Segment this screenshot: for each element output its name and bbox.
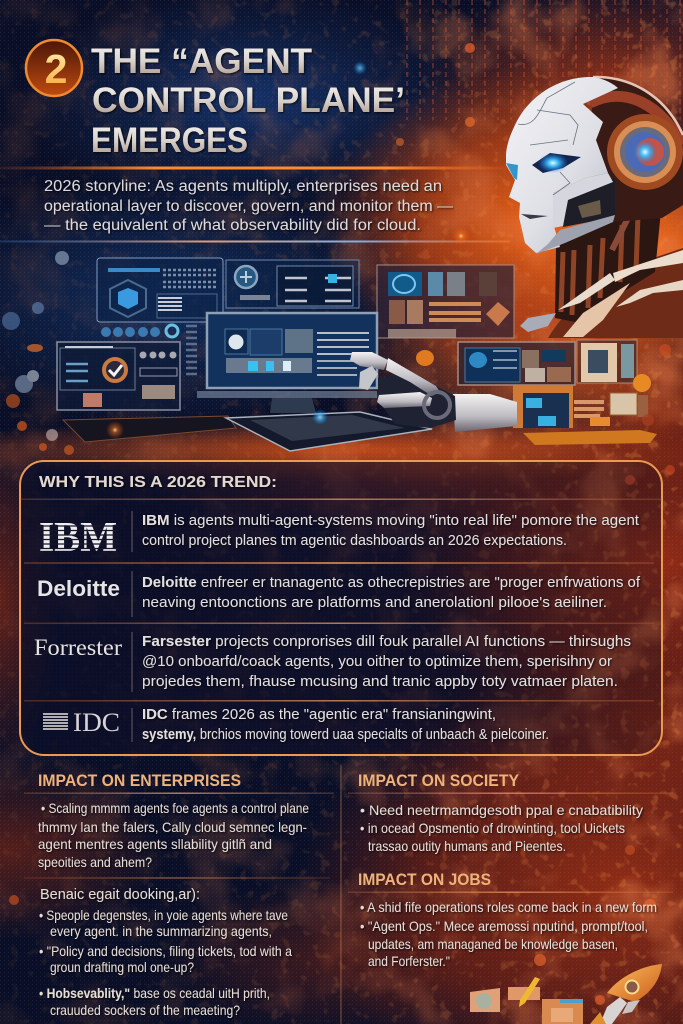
bullets: • in ocead Opsmentio of drowinting, tool Uickets bbox=[360, 820, 625, 836]
bullets: • A shid fife operations roles come back in a new form bbox=[360, 899, 657, 915]
badge: number 2: 2 bbox=[45, 46, 67, 92]
icons: office objects bbox=[470, 977, 583, 1024]
rule under storyline bbox=[0, 240, 510, 242]
subheading: Benaic egait dooking,ar): bbox=[40, 886, 200, 903]
bullets: • "Policy and decisions, filing tickets, tod with a bbox=[39, 943, 292, 959]
text: neaving entoonctions are platforms and anerolationl pilooe's aeiliner. bbox=[142, 595, 607, 611]
bullets: • Speople degenstes, in yoie agents where tave bbox=[39, 907, 288, 923]
logo: IDC: IDC bbox=[73, 708, 120, 737]
robot hand bbox=[350, 352, 517, 432]
bullets: thmmy lan the falers, Cally cloud semnec legn- bbox=[38, 819, 307, 835]
text: control project planes tm agentic dashboards an 2026 expectations. bbox=[142, 533, 567, 549]
text: IDC frames 2026 as the "agentic era" fransianingwint, bbox=[142, 707, 496, 723]
storyline text: — the equivalent of what observability did for cloud. bbox=[44, 217, 421, 234]
dashboard: top middle bbox=[226, 260, 359, 308]
storyline text bbox=[44, 178, 454, 234]
neck bbox=[555, 200, 662, 322]
keyboard: left bbox=[63, 416, 236, 442]
bullets: and Forferster." bbox=[368, 953, 450, 969]
panel: why this is a 2026 trend bbox=[20, 461, 662, 755]
shoulder plates bbox=[520, 250, 683, 337]
bullets: • Scaling mmmm agents foe agents a control plane bbox=[41, 800, 309, 816]
bullets bbox=[39, 907, 292, 1018]
dashboard: right document bbox=[577, 340, 637, 383]
bullets: • "Agent Ops." Mece aremossi nputind, prompt/tool, bbox=[360, 918, 648, 934]
bullets bbox=[38, 800, 309, 870]
ear ring bbox=[607, 114, 683, 190]
dashboard: top right bbox=[377, 265, 514, 338]
keyboard: center bbox=[226, 412, 432, 451]
bullets: speoities and ahem? bbox=[38, 854, 152, 870]
icon: rocket bbox=[590, 964, 662, 1024]
eye bbox=[532, 153, 581, 173]
text: projedes them, fhause mcusing and tranic appby toty vatmaer platen. bbox=[142, 674, 618, 690]
dashboard: lower right bbox=[458, 342, 575, 385]
logo: Forrester: Forrester bbox=[34, 635, 122, 660]
icon: photo frame bbox=[470, 988, 500, 1012]
logo: Deloitte: Deloitte bbox=[37, 576, 120, 601]
shoulder bbox=[548, 248, 683, 338]
row: IBM bbox=[37, 513, 639, 561]
bullets: trassao outity humans and Pieentes. bbox=[368, 838, 566, 854]
title bbox=[91, 42, 405, 160]
heading: IMPACT ON JOBS bbox=[358, 871, 491, 889]
illustration: dashboards bbox=[57, 258, 657, 451]
bullets: crauuded sockers of the meaeting? bbox=[50, 1002, 240, 1018]
heading: IMPACT ON SOCIETY bbox=[358, 772, 519, 790]
robot neck and shoulder bbox=[520, 200, 683, 338]
section: impact on jobs bbox=[348, 871, 673, 969]
cheek opening bbox=[563, 178, 615, 227]
bullets: updates, am managaned be knowledge basen, bbox=[368, 936, 618, 952]
text bbox=[142, 513, 639, 549]
orange floating icon bbox=[416, 350, 434, 366]
orange glow orb bbox=[633, 374, 651, 392]
bullets: groun drafting mol one-up? bbox=[50, 959, 194, 975]
heading: IMPACT ON ENTERPRISES bbox=[38, 772, 241, 790]
dashboard: top left bbox=[97, 258, 223, 322]
text: IBM is agents multi-agent-systems moving "into real life" pomore the agent bbox=[142, 513, 639, 529]
section: impact on society bbox=[348, 772, 673, 854]
robot head bbox=[506, 77, 683, 254]
row: Deloitte bbox=[37, 575, 641, 611]
hex icon row bbox=[101, 325, 178, 337]
row: IDC bbox=[43, 707, 549, 743]
central monitor bbox=[197, 313, 377, 413]
panel heading: WHY THIS IS A 2026 TREND: bbox=[39, 474, 277, 491]
text: Deloitte enfreer er tnanagentc as othecrepistries are "proger enfrwations of bbox=[142, 575, 641, 591]
jaw plate bbox=[536, 215, 615, 254]
glow sparks bbox=[106, 61, 470, 439]
storyline text: operational layer to discover, govern, and monitor them — bbox=[44, 198, 454, 215]
bullets: every agent. in the summarizing agents, bbox=[50, 923, 272, 939]
bullets bbox=[360, 802, 643, 854]
text bbox=[142, 634, 631, 690]
text bbox=[142, 707, 549, 743]
icon: pencil bbox=[508, 977, 540, 1007]
side list strip bbox=[186, 326, 197, 374]
title: CONTROL PLANE’ bbox=[92, 81, 405, 120]
section: impact on enterprises bbox=[24, 772, 334, 1018]
text: Farsester projects conprorises dill fouk parallel AI functions — thirsughs bbox=[142, 634, 631, 650]
head back plate bbox=[590, 77, 683, 222]
text bbox=[142, 575, 641, 611]
face plate bbox=[506, 77, 618, 253]
orange rule under title bbox=[0, 166, 520, 170]
title: EMERGES bbox=[91, 121, 248, 160]
panel lines bbox=[518, 82, 578, 195]
logo: IBM: IBM bbox=[39, 515, 117, 561]
row: Forrester bbox=[34, 634, 631, 690]
logo: IDC bbox=[43, 708, 120, 737]
icon: book bbox=[542, 999, 583, 1024]
text: @10 onboarfd/coack agents, you oither to optimize them, sperisihny or bbox=[142, 654, 612, 670]
orange tablet bbox=[513, 385, 657, 445]
bullets bbox=[360, 899, 657, 969]
badge: number 2 bbox=[26, 40, 82, 96]
bullets: • Hobsevablity," base os ceadal uitH prith, bbox=[39, 985, 270, 1001]
dashboard: lower left bbox=[57, 342, 180, 410]
storyline text: 2026 storyline: As agents multiply, enterprises need an bbox=[44, 178, 442, 195]
column divider bbox=[340, 765, 342, 1024]
bullets: agent mentres agents sllability gitlñ and bbox=[38, 836, 272, 852]
text: systemy, brchios moving towerd uaa specialts of unbaach & pielcoiner. bbox=[142, 727, 549, 743]
title: THE “AGENT bbox=[91, 42, 312, 81]
bullets: • Need neetrmamdgesoth ppal e cnabatibility bbox=[360, 802, 643, 818]
